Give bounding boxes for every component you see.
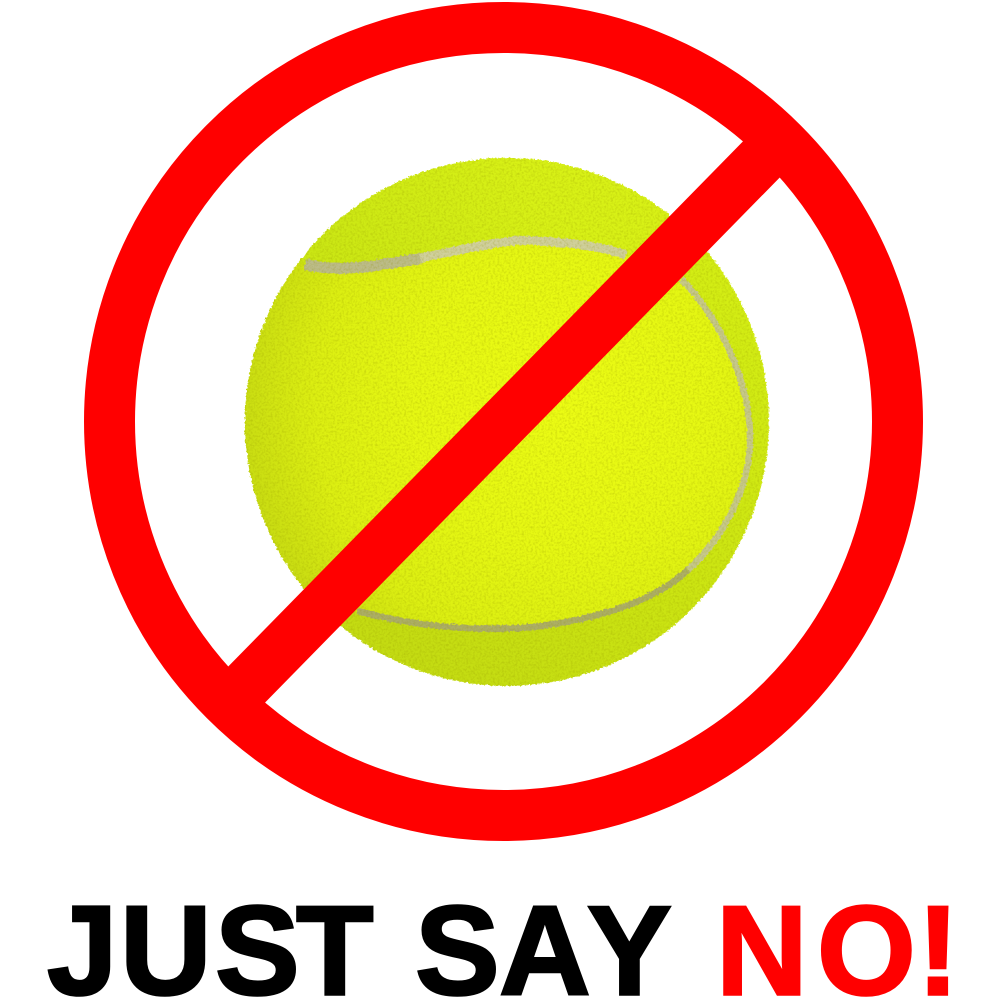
upper panel: [304, 157, 669, 256]
slogan: [47, 880, 959, 1000]
right seam: [681, 279, 750, 570]
top seam left part: [305, 258, 422, 268]
main panel: [244, 244, 748, 626]
icon: prohibition sign: [110, 28, 898, 816]
lower seam: [357, 570, 688, 629]
top seam right part: [420, 240, 626, 258]
ring: [110, 28, 898, 816]
seam notch: [283, 238, 311, 258]
ball outer panel: [245, 158, 769, 686]
diagonal bar: [236, 150, 771, 695]
icon: tennis ball: [244, 157, 770, 687]
